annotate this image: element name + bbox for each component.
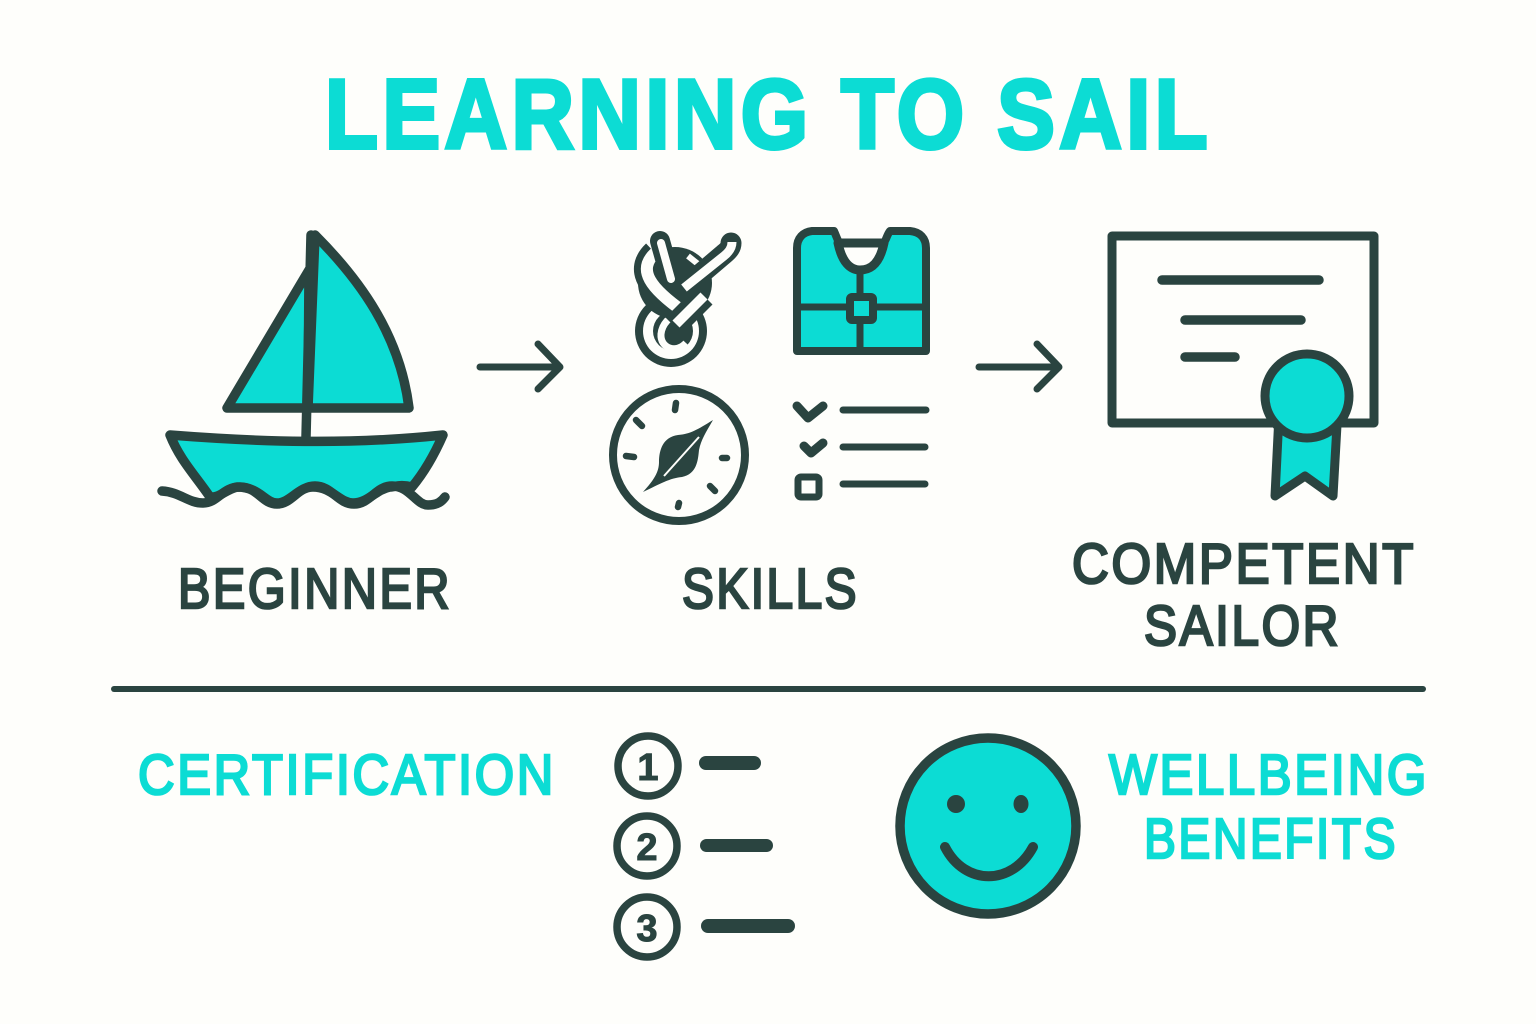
icon: certificate <box>1112 236 1374 496</box>
icon: smiley <box>900 738 1076 914</box>
icon: life jacket <box>797 231 926 351</box>
heading: wellbeing benefits: WELLBEING <box>1109 743 1429 807</box>
numbered list: 2 <box>636 827 658 869</box>
label: competent sailor <box>1072 532 1416 658</box>
label: competent sailor: SAILOR <box>1144 594 1341 658</box>
heading: wellbeing benefits <box>1109 743 1429 871</box>
title: LEARNING TO SAIL <box>325 59 1212 169</box>
icon: sailboat <box>162 235 445 505</box>
arrow: skills to competent sailor <box>979 344 1059 389</box>
label: skills: SKILLS <box>682 557 859 621</box>
numbered list <box>617 736 795 957</box>
numbered list: 1 <box>637 747 659 789</box>
heading: certification: CERTIFICATION <box>138 743 556 807</box>
divider <box>111 686 1426 692</box>
label: beginner: BEGINNER <box>178 557 452 621</box>
icon: compass <box>613 389 745 521</box>
icon: knot <box>635 241 732 367</box>
heading: wellbeing benefits: BENEFITS <box>1144 807 1398 871</box>
numbered list: 3 <box>636 908 658 950</box>
label: competent sailor: COMPETENT <box>1072 532 1416 596</box>
arrow: beginner to skills <box>480 344 560 389</box>
icon: checklist <box>797 406 926 497</box>
